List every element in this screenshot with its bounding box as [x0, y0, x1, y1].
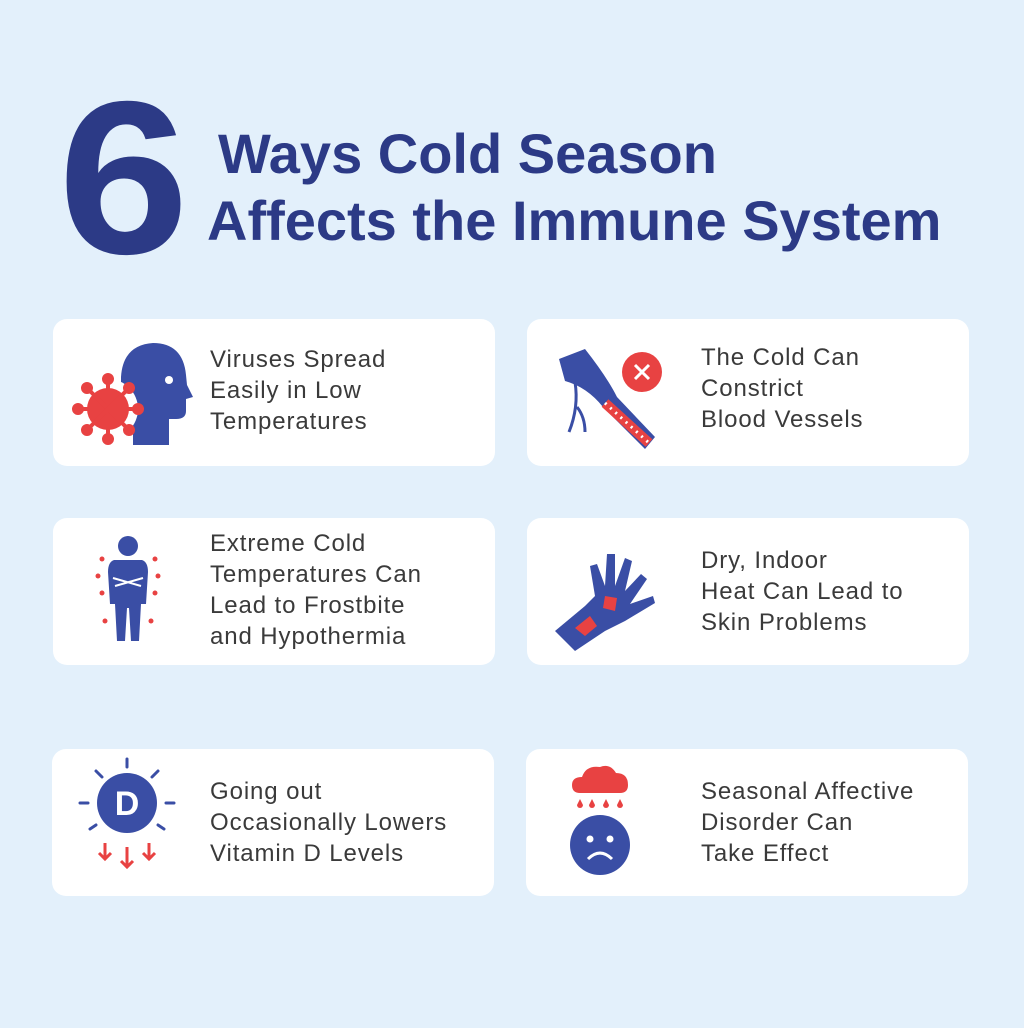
text: Easily in Low: [210, 377, 362, 404]
text: Lead to Frostbite: [210, 592, 405, 619]
text: Going out: [210, 778, 322, 805]
text: and Hypothermia: [210, 623, 406, 650]
text: [210, 778, 447, 867]
text: Vitamin D Levels: [210, 840, 404, 867]
title line 1: Ways Cold Season: [218, 122, 717, 185]
icon: vitamin D sun: D: [115, 785, 139, 823]
panel: vitamin D: [52, 749, 494, 896]
icon: sad face with rain cloud: [570, 766, 630, 875]
icon: cold person: [96, 536, 160, 641]
text: [701, 344, 863, 433]
icon: vitamin D sun: [78, 758, 176, 869]
icon: blood vessel: [559, 349, 662, 449]
panel: blood vessels: [527, 319, 969, 466]
text: [701, 547, 904, 636]
text: Constrict: [701, 375, 804, 402]
text: The Cold Can: [701, 344, 860, 371]
text: Temperatures: [210, 408, 368, 435]
text: Blood Vessels: [701, 406, 863, 433]
panel: seasonal affective disorder: [526, 749, 968, 896]
title number: 6: [58, 57, 189, 300]
text: Dry, Indoor: [701, 547, 828, 574]
text: Viruses Spread: [210, 346, 386, 373]
text: Temperatures Can: [210, 561, 422, 588]
text: Heat Can Lead to: [701, 578, 904, 605]
title line 2: Affects the Immune System: [207, 189, 941, 252]
text: [210, 530, 422, 650]
text: Take Effect: [701, 840, 829, 867]
text: Occasionally Lowers: [210, 809, 447, 836]
panel: skin problems: [527, 518, 969, 665]
text: Seasonal Affective: [701, 778, 914, 805]
text: Extreme Cold: [210, 530, 366, 557]
panel: viruses: [53, 319, 495, 466]
text: Disorder Can: [701, 809, 853, 836]
icon: dry hand: [555, 554, 655, 651]
text: [701, 778, 914, 867]
text: [210, 346, 386, 435]
icon: virus and head: [72, 343, 193, 445]
text: Skin Problems: [701, 609, 867, 636]
panel: frostbite: [53, 518, 495, 665]
